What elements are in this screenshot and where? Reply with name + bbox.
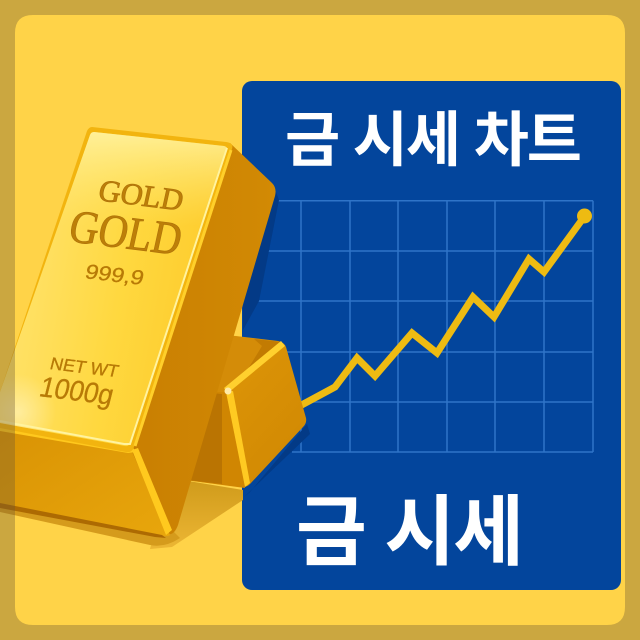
bar side face (132, 143, 276, 534)
bar engraving: GOLD small: GOLD (95, 173, 187, 217)
bar shadow on panel (243, 192, 279, 330)
bar engraving: purity: 999,9 (83, 261, 146, 290)
bar engraving: net weight label: NET WT (48, 353, 121, 381)
icon: small gold bar (150, 333, 310, 549)
bar bottom face (0, 427, 170, 536)
line chart: rising gold price (296, 208, 592, 408)
bar front face (0, 127, 232, 452)
bar engraving: weight: 1000g (36, 371, 117, 412)
bar bevels (132, 448, 172, 535)
bar shadow on background (0, 500, 180, 546)
icon: large gold bar (0, 127, 279, 546)
grid (250, 201, 593, 452)
bar engraving: GOLD large: GOLD (65, 201, 187, 266)
panel footer heading: 금 시세 (296, 471, 522, 582)
panel title: 금 시세 차트 (285, 92, 582, 179)
panel: chart (242, 81, 621, 590)
